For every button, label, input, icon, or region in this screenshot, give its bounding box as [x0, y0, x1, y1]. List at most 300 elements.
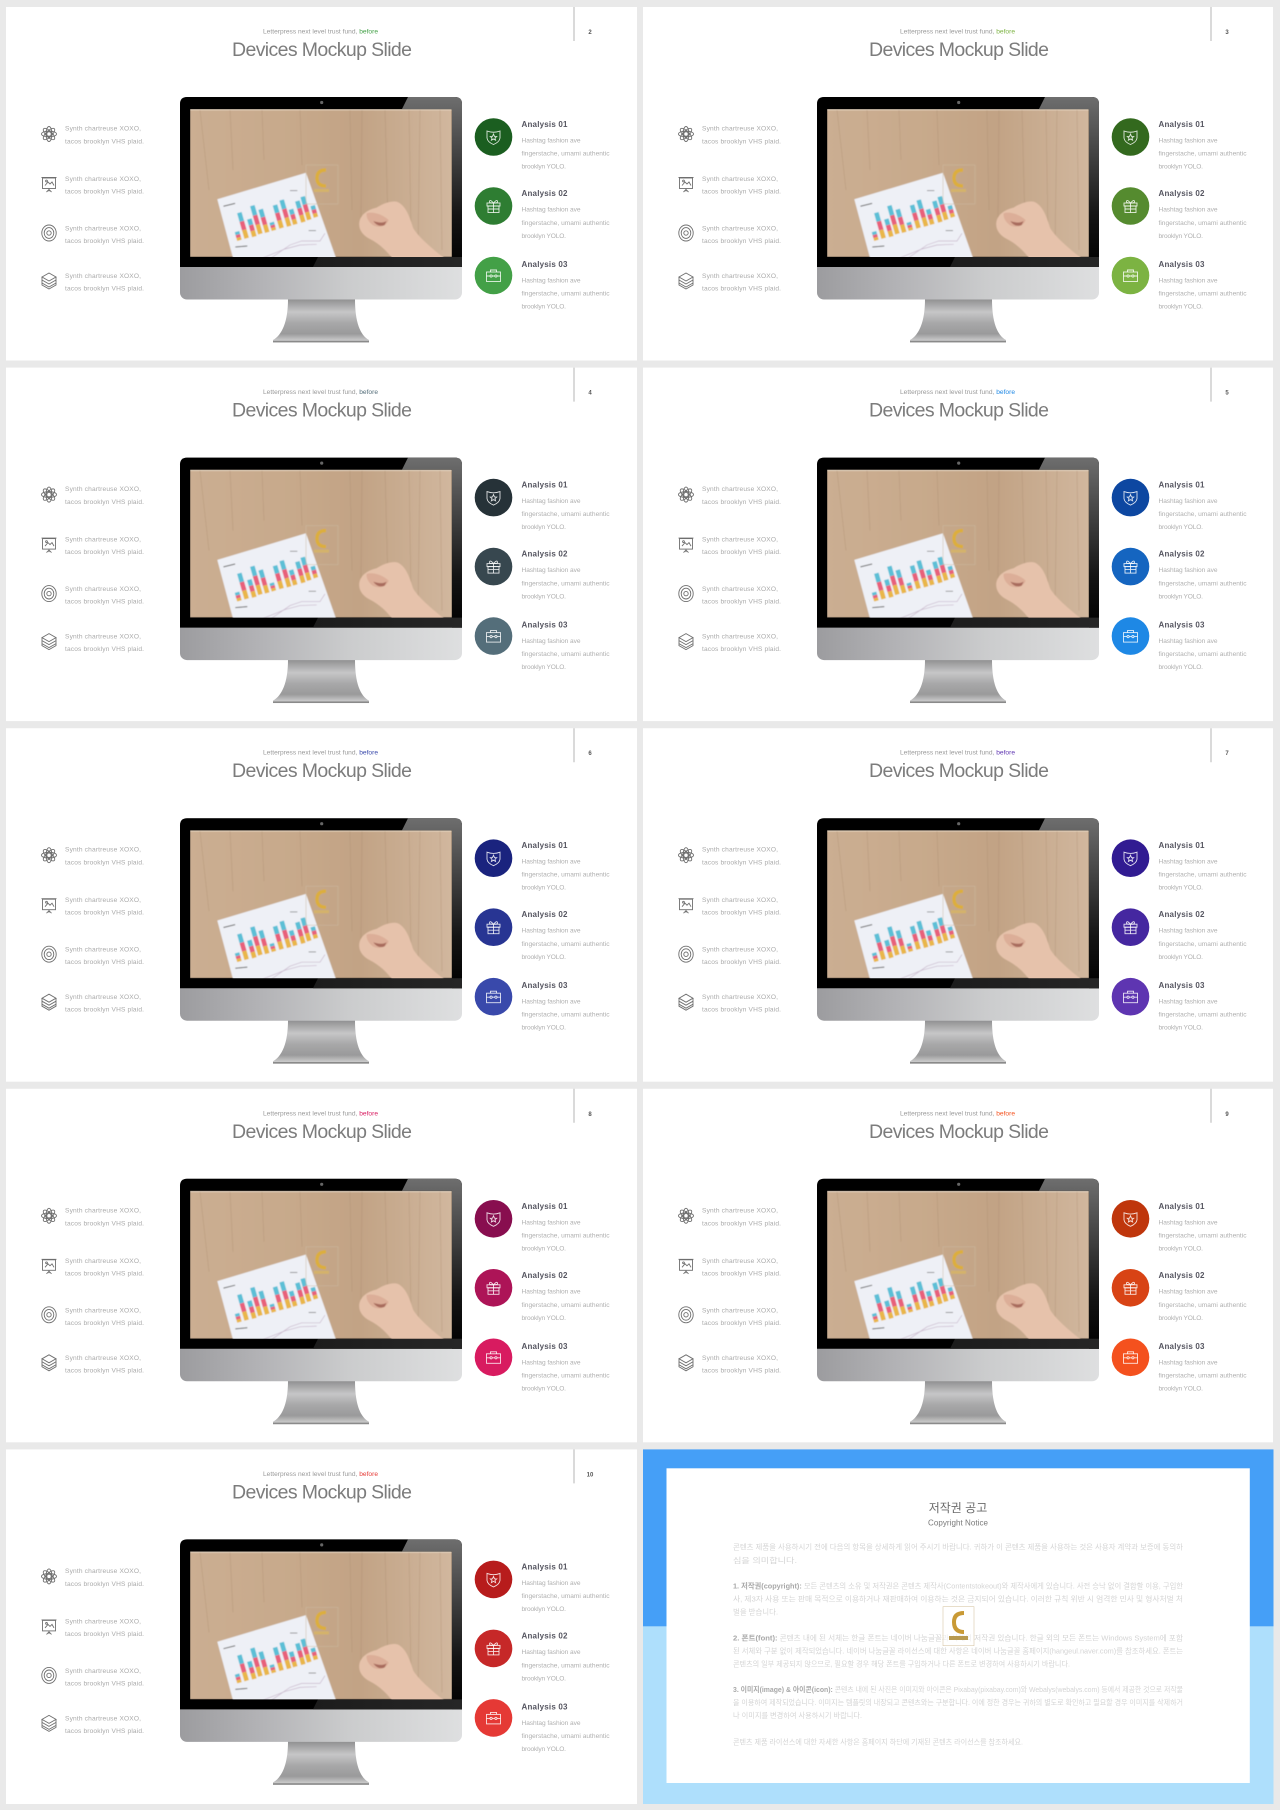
feature text 2: tacos brooklyn VHS plaid. [702, 549, 781, 556]
feature text 4: tacos brooklyn VHS plaid. [65, 286, 144, 292]
icon: flower [42, 487, 56, 502]
feature text 2: Synth chartreuse XOXO, [702, 897, 778, 904]
icon: target [42, 1307, 56, 1323]
feature text 3: tacos brooklyn VHS plaid. [65, 238, 144, 245]
analysis 01: Analysis 01 [522, 481, 568, 490]
analysis 01: Hashtag fashion ave [1158, 859, 1218, 866]
analysis 02: fingerstache, umami authentic [522, 581, 610, 588]
analysis 02: Hashtag fashion ave [1158, 567, 1218, 574]
feature text 3: tacos brooklyn VHS plaid. [65, 1680, 144, 1687]
paragraph 1 copyright: 벌을 받습니다. [733, 1608, 778, 1616]
feature text 4: Synth chartreuse XOXO, [65, 634, 141, 641]
slide panel [643, 368, 1273, 721]
analysis 01: fingerstache, umami authentic [1158, 872, 1247, 879]
feature text 3 [65, 1307, 144, 1327]
feature text 1 [65, 1207, 144, 1227]
notice subtitle: Copyright Notice [928, 1518, 989, 1528]
subtitle: Letterpress next level trust fund, before [263, 389, 378, 396]
analysis 01: fingerstache, umami authentic [522, 511, 610, 518]
analysis 02 [475, 548, 610, 601]
feature text 4: Synth chartreuse XOXO, [702, 994, 778, 1001]
feature text 1: Synth chartreuse XOXO, [65, 486, 141, 493]
monitor mockup [180, 818, 462, 1064]
analysis 03: Hashtag fashion ave [522, 638, 581, 645]
feature text 3: Synth chartreuse XOXO, [65, 1307, 141, 1314]
page number tab: 2 [588, 30, 592, 36]
slide 4: slate [6, 368, 637, 721]
analysis 01 [1112, 839, 1247, 892]
page number tab [1211, 7, 1229, 41]
icon: presentation board [678, 538, 694, 553]
left feature list [42, 847, 144, 1014]
icon: layers [42, 1355, 56, 1371]
monitor mockup [180, 1539, 462, 1785]
white card [666, 1468, 1250, 1783]
analysis 01 [1112, 118, 1247, 170]
analysis 03: Analysis 03 [522, 621, 568, 630]
analysis 03 [475, 1699, 610, 1753]
icon: layers [42, 1715, 56, 1731]
feature text 3: Synth chartreuse XOXO, [65, 947, 141, 954]
icon: layers [679, 1355, 693, 1371]
analysis 01: Hashtag fashion ave [522, 1219, 581, 1226]
feature text 1: tacos brooklyn VHS plaid. [702, 138, 781, 146]
feature text 4: tacos brooklyn VHS plaid. [65, 1728, 144, 1735]
feature text 2: Synth chartreuse XOXO, [65, 1258, 141, 1265]
feature text 4: Synth chartreuse XOXO, [702, 634, 778, 641]
analysis 01: fingerstache, umami authentic [522, 1232, 610, 1239]
page number tab: 5 [1225, 391, 1229, 397]
feature text 3: Synth chartreuse XOXO, [702, 947, 778, 954]
feature text 4: Synth chartreuse XOXO, [702, 273, 778, 280]
analysis 02 [475, 908, 610, 961]
paragraph 2 font: 콘텐츠의 일부 제공되지 않으므로, 필요할 경우 해당 폰트를 구입하거나 다른 폰트로 변경하여 사용하시기 바랍니다. [733, 1660, 1070, 1668]
feature text 1: tacos brooklyn VHS plaid. [65, 860, 144, 867]
analysis 03: brooklyn YOLO. [1158, 664, 1203, 671]
analysis 01: Analysis 01 [522, 841, 568, 850]
title: Devices Mockup Slide [232, 400, 412, 422]
icon: flower [42, 1208, 56, 1223]
left feature list [678, 126, 781, 292]
paragraph 3 image and icon: 나 이미지를 변경하여 사용하시기 바랍니다. [733, 1711, 862, 1720]
feature text 1: tacos brooklyn VHS plaid. [702, 499, 781, 506]
feature text 4 [65, 634, 144, 653]
analysis 01 [475, 839, 610, 892]
icon: presentation board [42, 1620, 56, 1634]
feature text 1: Synth chartreuse XOXO, [65, 1568, 141, 1575]
icon: flower [42, 1569, 56, 1584]
analysis 03: Analysis 03 [1158, 981, 1205, 990]
icon: presentation board [42, 899, 56, 913]
icon: flower [678, 126, 694, 142]
analysis 02: brooklyn YOLO. [522, 594, 566, 601]
feature text 4 [65, 1355, 144, 1374]
left feature list [678, 847, 781, 1014]
analysis 01: Hashtag fashion ave [522, 1580, 581, 1587]
slide panel [643, 7, 1273, 360]
icon: target [679, 225, 693, 241]
feature text 4 [65, 273, 144, 292]
feature text 2: Synth chartreuse XOXO, [65, 1618, 141, 1625]
watermark logo [943, 1607, 974, 1646]
analysis 02: Hashtag fashion ave [1158, 1288, 1218, 1295]
analysis 03 [475, 978, 610, 1032]
icon: flower [678, 848, 694, 863]
analysis 03: Analysis 03 [1158, 621, 1205, 630]
subtitle: Letterpress next level trust fund, before [263, 1471, 378, 1478]
feature text 3: tacos brooklyn VHS plaid. [702, 238, 781, 245]
icon: target [679, 586, 693, 602]
feature text 3: tacos brooklyn VHS plaid. [65, 959, 144, 966]
icon: presentation board [42, 178, 56, 192]
subtitle: Letterpress next level trust fund, before [900, 750, 1015, 757]
feature text 2: tacos brooklyn VHS plaid. [65, 1631, 144, 1638]
left feature list [678, 1207, 781, 1374]
analysis 01: brooklyn YOLO. [522, 885, 566, 892]
analysis 03: Analysis 03 [522, 1702, 568, 1711]
paragraph 2 font: 된 서체와 구분 없이 제작되었습니다. 네이버 나눔글꼴 라이선스에 대한 사항은 네이버 나눔글꼴 홈페이지(hangeul.naver.com)를 참조하세요. 폰트는 [733, 1646, 1183, 1656]
feature text 3 [65, 1668, 144, 1687]
feature text 2: tacos brooklyn VHS plaid. [65, 549, 144, 556]
analysis 02 [1112, 187, 1247, 240]
page number tab: 10 [587, 1472, 594, 1478]
analysis 01 [475, 1561, 610, 1613]
analysis 02: Analysis 02 [522, 189, 568, 198]
analysis 02: Hashtag fashion ave [1158, 206, 1218, 214]
paragraph 1 copyright: 사, 제3자 사용 또는 판매 목적으로 이용하거나 재판매하여 이용하는 것은 금지되어 있습니다. 이러한 규칙 위반 시 엄격한 민사 및 형사처벌 처 [733, 1594, 1183, 1604]
analysis 02 [1112, 908, 1247, 961]
icon: layers [679, 994, 693, 1010]
analysis 02: brooklyn YOLO. [522, 954, 566, 961]
feature text 2 [702, 897, 781, 917]
feature text 2 [65, 176, 144, 196]
analysis 03: Hashtag fashion ave [522, 999, 581, 1006]
analysis 03: Hashtag fashion ave [522, 278, 581, 284]
feature text 1: Synth chartreuse XOXO, [65, 126, 141, 132]
analysis 03: Hashtag fashion ave [1158, 999, 1218, 1006]
analysis 03: Hashtag fashion ave [1158, 638, 1218, 645]
subtitle: Letterpress next level trust fund, before [900, 28, 1015, 36]
icon: target [42, 1667, 56, 1683]
monitor mockup [180, 458, 462, 703]
analysis 02: fingerstache, umami authentic [522, 941, 610, 948]
slide panel [643, 1089, 1273, 1442]
feature text 4: Synth chartreuse XOXO, [65, 994, 141, 1001]
analysis 01: fingerstache, umami authentic [1158, 150, 1247, 158]
feature text 3: Synth chartreuse XOXO, [65, 1668, 141, 1675]
feature text 1: Synth chartreuse XOXO, [65, 847, 141, 854]
subtitle: Letterpress next level trust fund, before [263, 750, 378, 757]
page number tab [574, 7, 592, 41]
feature text 3: tacos brooklyn VHS plaid. [702, 959, 781, 966]
analysis 02: brooklyn YOLO. [522, 1675, 566, 1682]
feature text 3 [702, 226, 781, 245]
analysis 01: fingerstache, umami authentic [522, 872, 610, 879]
analysis 03: Analysis 03 [1158, 1342, 1205, 1351]
analysis 02: Analysis 02 [522, 550, 568, 559]
analysis 02: Analysis 02 [1158, 550, 1205, 559]
intro paragraph [733, 1542, 1183, 1565]
feature text 1: tacos brooklyn VHS plaid. [65, 1581, 144, 1588]
icon: flower [42, 848, 56, 863]
analysis 03: brooklyn YOLO. [522, 304, 566, 310]
feature text 1: tacos brooklyn VHS plaid. [702, 860, 781, 867]
analysis 01 [1112, 1200, 1247, 1252]
paragraph 1 copyright: 1. 저작권(copyright): 모든 콘텐츠의 소유 및 저작권은 콘텐츠 제작사(Contentstokeout)와 제작사에게 있습니다. 사전 승낙 없이 결합할 이용, 구입한 [733, 1582, 1183, 1590]
icon: presentation board [42, 1259, 56, 1274]
feature text 4 [65, 1715, 144, 1735]
analysis 02: Analysis 02 [522, 1271, 568, 1280]
feature text 4: tacos brooklyn VHS plaid. [702, 646, 781, 653]
title: Devices Mockup Slide [869, 39, 1049, 61]
analysis 02: Hashtag fashion ave [522, 928, 581, 935]
analysis 02: brooklyn YOLO. [522, 1315, 566, 1322]
analysis 01: Analysis 01 [522, 1202, 568, 1211]
intro paragraph: 콘텐츠 제품을 사용하시기 전에 다음의 항목을 상세하게 읽어 주시기 바랍니다. 귀하가 이 콘텐츠 제품을 사용하는 것은 사용자 계약과 보증에 동의하 [733, 1542, 1183, 1552]
icon: target [42, 225, 56, 241]
feature text 1 [65, 126, 144, 146]
slide 3: light green [643, 7, 1273, 360]
analysis 01: Hashtag fashion ave [1158, 1219, 1218, 1226]
feature text 2 [65, 1258, 144, 1277]
analysis 01 [475, 1200, 610, 1252]
feature text 2 [702, 537, 781, 556]
analysis 03: fingerstache, umami authentic [1158, 290, 1247, 298]
slide panel [6, 1449, 637, 1804]
analysis 02: Hashtag fashion ave [522, 567, 581, 574]
page number tab [574, 368, 592, 402]
feature text 4: Synth chartreuse XOXO, [65, 1715, 141, 1722]
analysis 03: Hashtag fashion ave [522, 1720, 581, 1727]
analysis 03: Hashtag fashion ave [522, 1359, 581, 1366]
analysis 02: fingerstache, umami authentic [1158, 581, 1247, 588]
feature text 1: Synth chartreuse XOXO, [65, 1207, 141, 1214]
analysis 02: Hashtag fashion ave [522, 1649, 581, 1656]
analysis 03: Analysis 03 [1158, 260, 1205, 269]
icon: flower [678, 1208, 694, 1223]
analysis 03: Analysis 03 [522, 981, 568, 990]
feature text 4: Synth chartreuse XOXO, [65, 273, 141, 280]
analysis 01: Hashtag fashion ave [522, 859, 581, 866]
monitor mockup [817, 97, 1099, 342]
feature text 3 [702, 947, 781, 966]
slide 6: indigo [6, 728, 637, 1082]
feature text 2: Synth chartreuse XOXO, [702, 176, 778, 183]
paragraph 1 copyright [733, 1582, 1183, 1616]
feature text 4 [702, 994, 781, 1014]
feature text 3: Synth chartreuse XOXO, [702, 226, 778, 232]
analysis 02 [1112, 1269, 1247, 1322]
analysis 03: fingerstache, umami authentic [1158, 1012, 1247, 1019]
slide 10: red [6, 1449, 637, 1804]
analysis 03: Analysis 03 [522, 260, 568, 269]
feature text 1 [65, 1568, 144, 1588]
analysis 03: Hashtag fashion ave [1158, 278, 1218, 284]
analysis 02 [1112, 548, 1247, 601]
analysis 02: Hashtag fashion ave [1158, 928, 1218, 935]
feature text 1 [702, 1207, 781, 1227]
feature text 2: Synth chartreuse XOXO, [702, 537, 778, 544]
analysis 02: Analysis 02 [1158, 189, 1205, 198]
title: Devices Mockup Slide [232, 760, 412, 782]
feature text 4: tacos brooklyn VHS plaid. [65, 1367, 144, 1374]
analysis 01: Analysis 01 [1158, 481, 1205, 490]
page number tab: 9 [1225, 1112, 1229, 1118]
feature text 1 [65, 847, 144, 867]
feature text 1 [65, 486, 144, 506]
feature text 4: Synth chartreuse XOXO, [65, 1355, 141, 1362]
analysis 03: fingerstache, umami authentic [522, 1012, 610, 1019]
icon: layers [42, 994, 56, 1010]
analysis 01: brooklyn YOLO. [1158, 885, 1203, 892]
analysis 01: Analysis 01 [522, 120, 568, 129]
feature text 4 [702, 1355, 781, 1374]
feature text 1: tacos brooklyn VHS plaid. [702, 1220, 781, 1227]
feature text 4 [702, 634, 781, 653]
intro paragraph: 심을 의미합니다. [733, 1556, 797, 1565]
subtitle: Letterpress next level trust fund, before [263, 1110, 378, 1117]
analysis 03 [475, 1338, 610, 1392]
analysis 01: brooklyn YOLO. [522, 1245, 566, 1252]
analysis 01: fingerstache, umami authentic [1158, 511, 1247, 518]
notice title: 저작권 공고 [929, 1501, 987, 1515]
analysis 03: fingerstache, umami authentic [1158, 651, 1247, 658]
feature text 2 [65, 537, 144, 556]
analysis 01 [475, 479, 610, 531]
feature text 3: Synth chartreuse XOXO, [65, 586, 141, 593]
feature text 4: Synth chartreuse XOXO, [702, 1355, 778, 1362]
analysis 03 [475, 617, 610, 671]
analysis 01: fingerstache, umami authentic [522, 150, 610, 158]
page number tab [1211, 368, 1229, 402]
feature text 2: tacos brooklyn VHS plaid. [702, 910, 781, 917]
analysis 03: brooklyn YOLO. [1158, 304, 1203, 310]
slide 9: orange [643, 1089, 1273, 1442]
feature text 2: Synth chartreuse XOXO, [65, 176, 141, 183]
analysis 03: brooklyn YOLO. [522, 1746, 566, 1753]
feature text 4 [702, 273, 781, 292]
subtitle: Letterpress next level trust fund, before [900, 389, 1015, 396]
closing line: 콘텐츠 제품 라이선스에 대한 자세한 사항은 홈페이지 하단에 기재된 콘텐츠 라이선스를 참조하세요. [733, 1738, 1023, 1746]
analysis 02: brooklyn YOLO. [1158, 1315, 1203, 1322]
feature text 4: tacos brooklyn VHS plaid. [702, 1367, 781, 1374]
page number tab: 6 [588, 751, 592, 757]
paragraph 3 image and icon: 3. 이미지(image) & 아이콘(icon): 콘텐츠 내에 된 사진은 이미지와 아이콘은 Pixabay(pixabay.com)와 Webalys(webalys.com) 등에서 제공한 것으로 저작물 [733, 1685, 1183, 1694]
title: Devices Mockup Slide [869, 1121, 1049, 1143]
analysis 02: fingerstache, umami authentic [1158, 220, 1247, 227]
page number tab: 7 [1225, 751, 1229, 757]
light blue lower background [643, 1626, 1274, 1804]
analysis 03: brooklyn YOLO. [1158, 1025, 1203, 1032]
paragraph 3 image and icon [733, 1685, 1183, 1720]
icon: presentation board [678, 1259, 694, 1274]
icon: presentation board [678, 178, 694, 192]
analysis 01: Analysis 01 [1158, 120, 1205, 129]
analysis 03 [1112, 617, 1247, 671]
feature text 1 [702, 847, 781, 867]
analysis 02: Analysis 02 [522, 1631, 568, 1640]
analysis 01: Hashtag fashion ave [522, 498, 581, 505]
feature text 2: Synth chartreuse XOXO, [65, 537, 141, 544]
blue upper background [643, 1449, 1274, 1626]
feature text 3: tacos brooklyn VHS plaid. [702, 599, 781, 606]
slide 2: green [6, 7, 637, 360]
slide panel [6, 1089, 637, 1442]
feature text 3: Synth chartreuse XOXO, [702, 1307, 778, 1314]
subtitle: Letterpress next level trust fund, before [263, 28, 378, 36]
analysis 01: Hashtag fashion ave [1158, 498, 1218, 505]
feature text 1: Synth chartreuse XOXO, [702, 486, 778, 493]
feature text 2: Synth chartreuse XOXO, [702, 1258, 778, 1265]
slide panel [643, 728, 1273, 1082]
feature text 1: Synth chartreuse XOXO, [702, 1207, 778, 1214]
monitor mockup [817, 1179, 1099, 1424]
analysis 01: fingerstache, umami authentic [522, 1593, 610, 1600]
analysis 02: Hashtag fashion ave [522, 1288, 581, 1295]
feature text 3: tacos brooklyn VHS plaid. [65, 599, 144, 606]
analysis 03: fingerstache, umami authentic [1158, 1372, 1247, 1379]
analysis 02: Analysis 02 [1158, 1271, 1205, 1280]
analysis 01: Hashtag fashion ave [1158, 138, 1218, 144]
copyright notice slide [643, 1449, 1274, 1804]
analysis 01: brooklyn YOLO. [522, 164, 566, 170]
analysis 02: fingerstache, umami authentic [1158, 1302, 1247, 1309]
feature text 1: tacos brooklyn VHS plaid. [65, 1220, 144, 1227]
analysis 03 [475, 257, 610, 310]
analysis 01: fingerstache, umami authentic [1158, 1232, 1247, 1239]
paragraph 3 image and icon: 을 이용하여 제작되었습니다. 이미지는 템플릿의 내장되고 콘텐츠와는 구분합니다. 이에 정한 경우는 귀하의 별도로 확인하고 필요할 경우 이미지를 삭제하거 [733, 1698, 1183, 1707]
analysis 02: brooklyn YOLO. [1158, 233, 1203, 240]
analysis 01: Analysis 01 [1158, 1202, 1205, 1211]
left feature list [42, 1568, 144, 1735]
icon: layers [679, 273, 693, 289]
icon: layers [679, 634, 693, 650]
analysis 02: brooklyn YOLO. [1158, 954, 1203, 961]
feature text 1: Synth chartreuse XOXO, [702, 126, 778, 132]
title: Devices Mockup Slide [232, 1481, 412, 1503]
feature text 3 [65, 586, 144, 606]
analysis 03: brooklyn YOLO. [522, 664, 566, 671]
feature text 2: tacos brooklyn VHS plaid. [65, 188, 144, 196]
icon: target [42, 946, 56, 962]
page number tab [1211, 728, 1229, 762]
feature text 2: tacos brooklyn VHS plaid. [702, 1270, 781, 1277]
feature text 2 [65, 1618, 144, 1638]
feature text 1 [702, 126, 781, 146]
monitor mockup [180, 97, 462, 342]
analysis 01: Analysis 01 [522, 1562, 568, 1571]
feature text 1: tacos brooklyn VHS plaid. [65, 138, 144, 146]
analysis 02: Analysis 02 [1158, 910, 1205, 919]
feature text 4 [65, 994, 144, 1014]
page number tab [574, 1449, 594, 1483]
analysis 03: brooklyn YOLO. [522, 1025, 566, 1032]
slide panel [6, 728, 637, 1082]
analysis 02: Analysis 02 [522, 910, 568, 919]
feature text 4: tacos brooklyn VHS plaid. [65, 646, 144, 653]
feature text 3 [702, 586, 781, 606]
feature text 3: Synth chartreuse XOXO, [65, 226, 141, 232]
analysis 03: fingerstache, umami authentic [522, 1733, 610, 1740]
analysis 02: Hashtag fashion ave [522, 206, 581, 214]
subtitle: Letterpress next level trust fund, before [900, 1110, 1015, 1117]
feature text 3: tacos brooklyn VHS plaid. [65, 1320, 144, 1327]
analysis 02: fingerstache, umami authentic [522, 1302, 610, 1309]
analysis 03: brooklyn YOLO. [522, 1385, 566, 1392]
feature text 2: tacos brooklyn VHS plaid. [65, 910, 144, 917]
icon: target [679, 1307, 693, 1323]
page number tab: 4 [588, 391, 592, 397]
